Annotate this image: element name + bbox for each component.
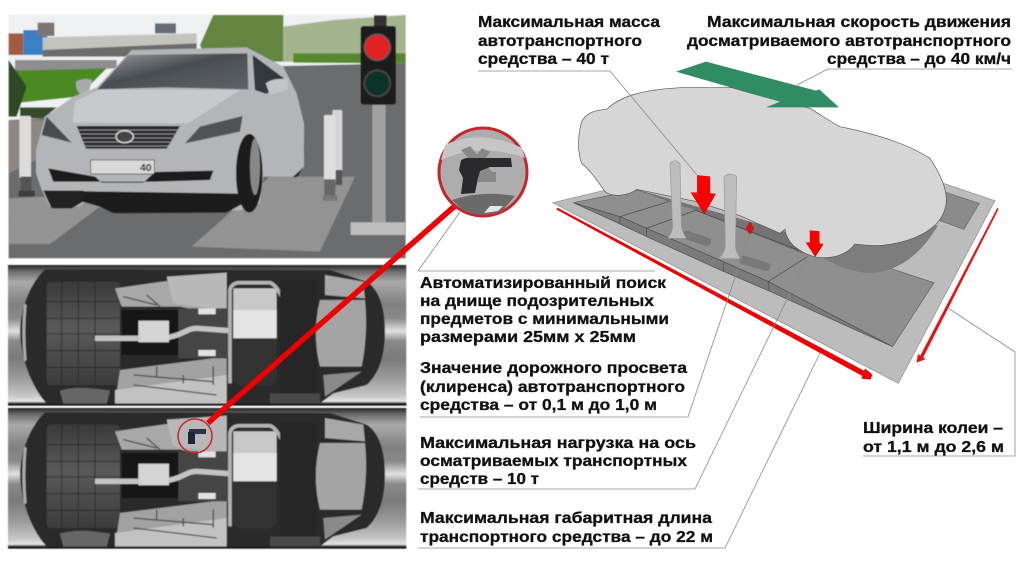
red arrow: axle load bbox=[806, 231, 823, 257]
sensor slots bbox=[687, 235, 766, 267]
red connector line from marker to magnifier bbox=[208, 205, 456, 423]
label: automated search: размерами 25мм х 25мм bbox=[420, 329, 636, 346]
licence plate number: 40 bbox=[140, 163, 152, 174]
car silhouette bbox=[579, 88, 946, 258]
label: overall length: Максимальная габаритная длина bbox=[420, 510, 712, 527]
label: automated search bbox=[420, 275, 669, 346]
label: ground clearance bbox=[420, 360, 687, 414]
label: overall length: транспортного средства – до 22 м bbox=[420, 529, 713, 546]
car bbox=[36, 47, 304, 213]
rear post of the right pair bbox=[332, 110, 342, 185]
photo: car on inspection ramps with traffic light bbox=[9, 15, 406, 258]
label: automated search: Автоматизированный поиск bbox=[420, 275, 666, 292]
traffic light bbox=[351, 15, 405, 235]
label: maximum speed: Максимальная скорость движения bbox=[707, 14, 1011, 31]
front post of the right pair bbox=[323, 115, 337, 201]
ramp plates bbox=[573, 190, 934, 347]
label: maximum speed bbox=[687, 14, 1011, 68]
road surface bbox=[9, 63, 406, 258]
diagram: inspection platform with car outline bbox=[553, 62, 999, 383]
leader line: overall length bbox=[418, 353, 820, 548]
label: maximum mass: средства – 40 т bbox=[478, 51, 609, 68]
left ramp bbox=[9, 197, 113, 244]
label: axle load bbox=[420, 435, 696, 488]
label: automated search: на днище подозрительных bbox=[420, 293, 654, 310]
background: trees and buildings bbox=[9, 15, 406, 118]
label: ground clearance: Значение дорожного просвета bbox=[420, 360, 687, 377]
label: overall length bbox=[420, 510, 713, 546]
base plate bbox=[553, 183, 995, 383]
label: track width bbox=[863, 420, 1004, 456]
post 1 bbox=[668, 161, 687, 238]
label: track width: от 1,1 м до 2,6 м bbox=[863, 439, 1004, 456]
green arrow: direction of movement bbox=[676, 62, 839, 107]
magnifier circle with pistol bbox=[439, 128, 527, 216]
label: axle load: Максимальная нагрузка на ось bbox=[420, 435, 696, 452]
label: maximum speed: средства – до 40 км/ч bbox=[827, 51, 1011, 68]
leader line: vehicle mass bbox=[478, 71, 697, 175]
scan: underbody image, clean bbox=[8, 265, 406, 406]
leader line: speed bbox=[797, 69, 1012, 85]
ramp front faces bbox=[573, 203, 893, 347]
far ramp on the right bbox=[938, 191, 979, 229]
red arrow: vehicle mass bbox=[691, 175, 716, 214]
label: axle load: средств – 10 т bbox=[420, 471, 539, 488]
label: maximum mass: Максимальная масса bbox=[478, 14, 660, 31]
label: axle load: осматриваемых транспортных bbox=[420, 453, 687, 470]
scan: underbody image with detected object bbox=[8, 408, 406, 549]
leader line: automated search bbox=[418, 212, 655, 271]
label: maximum mass: автотранспортного bbox=[478, 33, 642, 50]
label: track width: Ширина колеи – bbox=[863, 420, 1003, 437]
pistol in scan with red marker circle bbox=[178, 419, 212, 453]
pistol bbox=[459, 158, 512, 194]
red marker: ground clearance bbox=[746, 222, 754, 235]
post 2 bbox=[719, 174, 741, 259]
label: maximum speed: досматриваемого автотранспортного bbox=[687, 33, 1011, 50]
leader line: track width bbox=[863, 308, 1015, 456]
left post bbox=[19, 116, 35, 197]
label: maximum mass bbox=[478, 14, 660, 68]
label: ground clearance: (клиренса) автотранспортного bbox=[420, 379, 685, 396]
red arrow: track width bbox=[917, 208, 999, 363]
dark band under the car bbox=[637, 189, 803, 254]
red arrow: overall length bbox=[557, 208, 872, 380]
leader line: clearance bbox=[420, 233, 750, 417]
leader line: axle load bbox=[418, 256, 808, 489]
label: ground clearance: средства – от 0,1 м до 1,0 м bbox=[420, 397, 657, 414]
car silhouette shadow bbox=[823, 225, 938, 273]
right ramp bbox=[192, 177, 355, 252]
label: automated search: предметов с минимальными bbox=[420, 311, 669, 328]
